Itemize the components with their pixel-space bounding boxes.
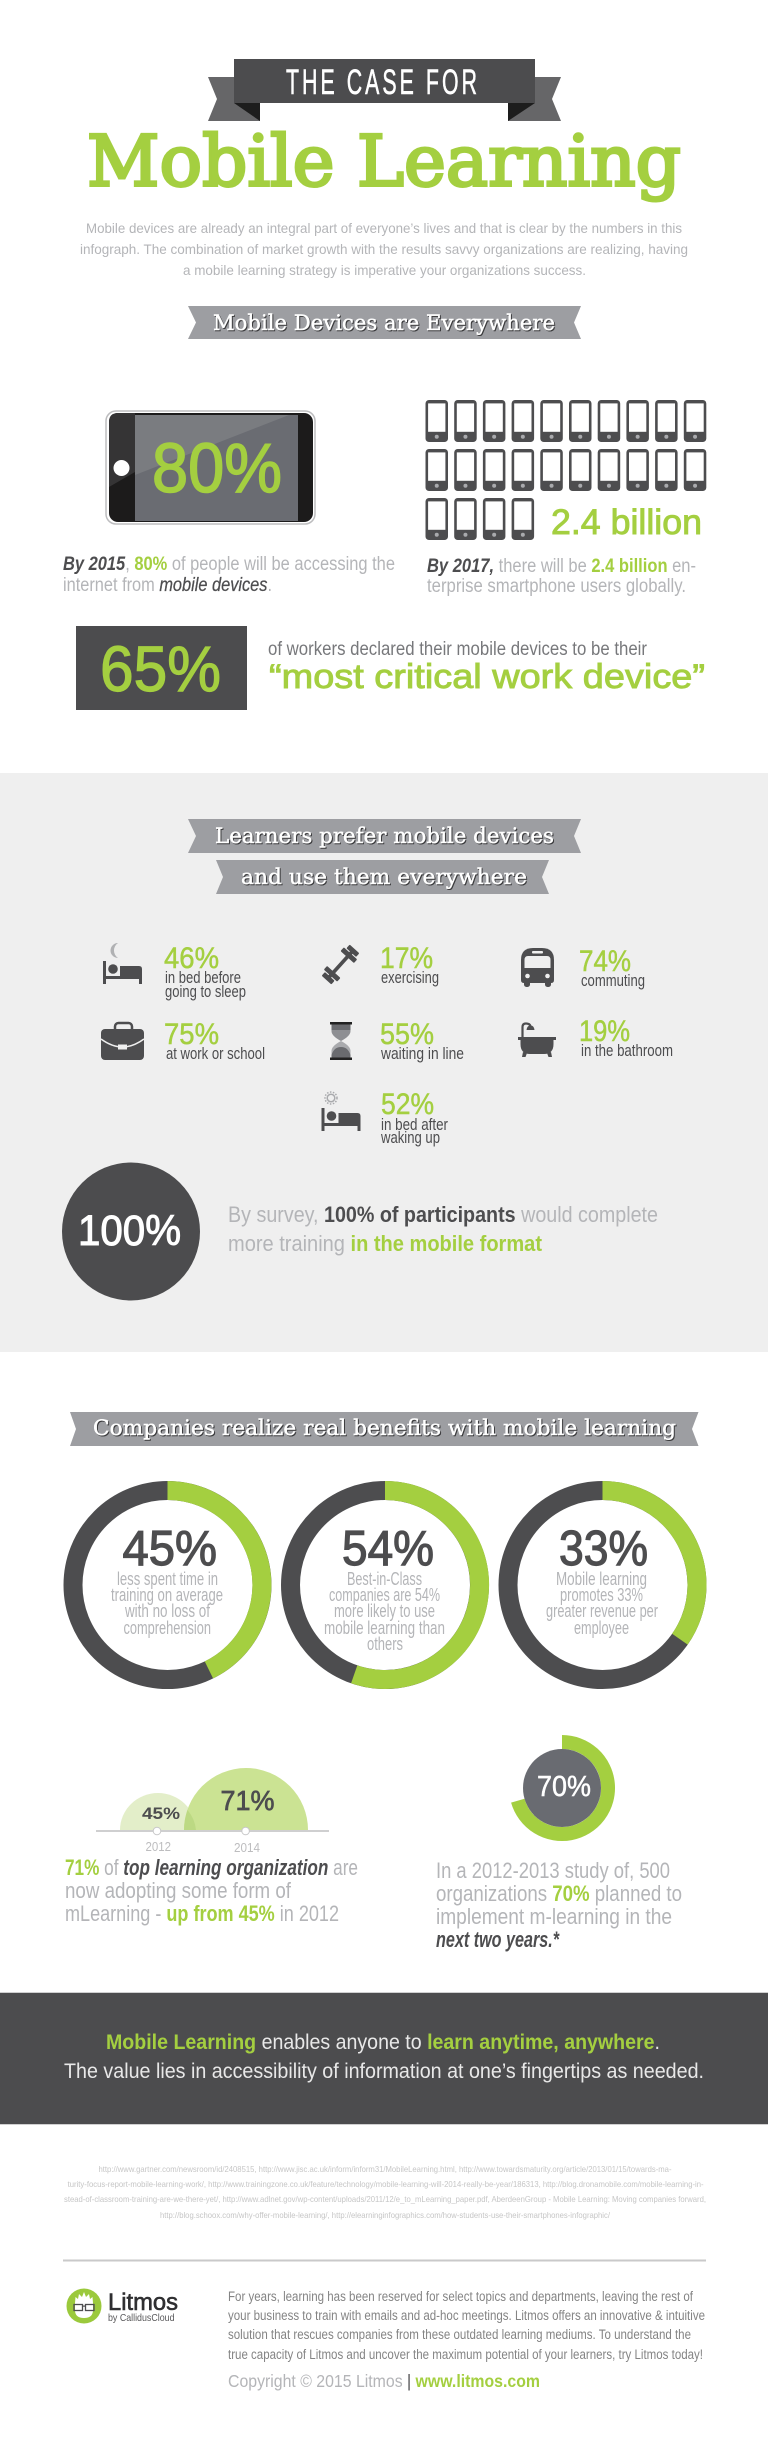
text: about Litmos bbox=[228, 2289, 705, 2362]
ribbon heading: Companies realize real benefits: Companies realize real benefits with mobile learning bbox=[93, 1416, 676, 1441]
text: 2.4 billion stat description: terprise smartphone users globally. bbox=[427, 576, 686, 597]
stat: 52% in bed after waking up: waking up bbox=[380, 1129, 440, 1147]
stat: 52% in bed after waking up: in bed after bbox=[381, 1116, 448, 1134]
stat: 19% in the bathroom: 19% bbox=[579, 1015, 630, 1048]
donut: 33%: 33% bbox=[559, 1522, 648, 1576]
chart: adoption 2012 to 2014: 45% bbox=[142, 1804, 180, 1823]
icon grid: smartphones with 2.4 billion bbox=[426, 400, 706, 542]
chart: adoption 2012 to 2014 bbox=[96, 1768, 329, 1855]
donut: 54%: Best-in-Class bbox=[347, 1569, 422, 1589]
intro paragraph: Mobile devices are already an integral part of everyone’s lives and that is clear by the numbers in this bbox=[86, 220, 682, 236]
text: source citations: http://blog.schoox.com/why-offer-mobile-learning/, http://elearninginfographics.com/how-students-use-their-smartphones-infographic/ bbox=[160, 2210, 611, 2220]
text: 71% of top learning organizations: now adopting some form of bbox=[65, 1878, 292, 1903]
intro paragraph bbox=[80, 220, 688, 278]
stat: 52% in bed after waking up: 52% bbox=[381, 1088, 434, 1121]
stat: 55% waiting in line: 55% bbox=[380, 1018, 434, 1051]
donut: 54%: companies are 54% bbox=[329, 1585, 440, 1605]
stat: 17% exercising: exercising bbox=[381, 969, 439, 987]
stat circle: 100% bbox=[62, 1162, 200, 1300]
stat: 75% at work or school: 75% bbox=[164, 1018, 219, 1051]
stat: 46% in bed before going to sleep bbox=[164, 942, 246, 1001]
panel: conclusion band bbox=[0, 1992, 768, 2125]
panel: conclusion band: Mobile Learning enables anyone to learn anytime, anywhere. bbox=[106, 2031, 660, 2054]
stat: 75% at work or school: at work or school bbox=[166, 1045, 265, 1063]
stat: 74% commuting: 74% bbox=[579, 945, 631, 978]
text: source citations bbox=[64, 2164, 706, 2220]
stat: 52% in bed after waking up bbox=[380, 1088, 448, 1147]
donut: 45% bbox=[73, 1490, 262, 1680]
text: source citations: stead-of-classroom-training-are-we-there-yet/, http://www.adlnet.gov/wp-content/uploads/2011/12/e_to_mLearning_paper.pdf, AberdeenGroup - Mobile Learning: Moving companies forward, bbox=[64, 2194, 706, 2204]
donut: 45%: less spent time in bbox=[117, 1569, 218, 1589]
icon: bathtub bbox=[518, 1024, 556, 1057]
panel: learners prefer mobile devices bbox=[0, 773, 768, 1352]
donut: 33% bbox=[508, 1490, 697, 1680]
stat: 19% in the bathroom bbox=[579, 1015, 673, 1060]
ribbon heading: Companies realize real benefits bbox=[70, 1412, 698, 1446]
text: 2012-2013 study: next two years.* bbox=[436, 1927, 560, 1952]
text: about Litmos: solution that rescues companies from these outdated learning mediums. To understand the bbox=[228, 2327, 691, 2342]
intro paragraph: infograph. The combination of market growth with the results savvy organizations are realizing, having bbox=[80, 241, 688, 257]
donut: 54%: more likely to use bbox=[334, 1601, 435, 1621]
logo: Litmos by CallidusCloud: Litmos bbox=[108, 2289, 178, 2316]
chart: adoption 2012 to 2014: 2014 bbox=[234, 1841, 260, 1855]
donut: 70%: 70% bbox=[537, 1771, 591, 1803]
ribbon heading: and use them everywhere: and use them everywhere bbox=[241, 865, 527, 890]
stat box: 65% bbox=[76, 626, 247, 710]
donut: 33%: promotes 33% bbox=[560, 1585, 643, 1605]
title banner: The Case For bbox=[208, 59, 561, 121]
text: survey result: By survey, 100% of participants would complete bbox=[228, 1202, 658, 1227]
text: 71% of top learning organizations: 71% of top learning organization are bbox=[65, 1855, 358, 1880]
icon: dumbbell bbox=[320, 943, 361, 986]
icon: hourglass bbox=[330, 1022, 352, 1060]
stat: 74% commuting: commuting bbox=[581, 972, 645, 990]
title: Mobile Learning: Mobile Learning bbox=[87, 120, 681, 202]
donut: 54%: others bbox=[367, 1634, 403, 1654]
donut: 45%: 45% bbox=[122, 1522, 217, 1576]
donut: 54% bbox=[290, 1490, 480, 1680]
text: most critical work device bbox=[268, 639, 705, 696]
chart: adoption 2012 to 2014: 2012 bbox=[146, 1840, 171, 1854]
text: 80% stat description: internet from mobile devices. bbox=[63, 575, 272, 596]
stat circle: 100%: 100% bbox=[78, 1207, 181, 1255]
text: 80% stat description: By 2015, 80% of people will be accessing the bbox=[63, 554, 395, 575]
icon: bed with sun bbox=[322, 1092, 360, 1131]
stat: 55% waiting in line: waiting in line bbox=[380, 1045, 464, 1063]
stat: 46% in bed before going to sleep: in bed before bbox=[165, 969, 241, 987]
ribbon heading: and use them everywhere bbox=[216, 860, 549, 894]
text: source citations: turity-focus-report-mobile-learning-work/, http://www.trainingzone.co.uk/feature/technology/mobile-learning-will-2014-really-be-year/186313, http://blog.dronamobile.com/mobile-learning-in- bbox=[68, 2179, 704, 2189]
text: survey result: more training in the mobile format bbox=[228, 1231, 542, 1256]
icon grid: smartphones with 2.4 billion: 2.4 billion bbox=[551, 503, 702, 542]
stat box: 65%: 65% bbox=[100, 633, 221, 705]
icon: bed with moon bbox=[103, 943, 142, 984]
icon: tablet with 80%: 80% bbox=[152, 429, 282, 507]
text: copyright and website: Copyright © 2015 Litmos | www.litmos.com bbox=[228, 2371, 540, 2391]
stat: 75% at work or school bbox=[164, 1018, 265, 1063]
stat: 55% waiting in line bbox=[380, 1018, 464, 1063]
text: 2012-2013 study bbox=[436, 1858, 682, 1952]
icon: tablet with 80% bbox=[106, 411, 315, 524]
donut: 45%: training on average bbox=[111, 1585, 223, 1605]
stat: 46% in bed before going to sleep: going to sleep bbox=[165, 983, 246, 1001]
donut: 54%: mobile learning than bbox=[324, 1618, 445, 1638]
text: 71% of top learning organizations: mLearning - up from 45% in 2012 bbox=[65, 1901, 339, 1926]
donut: 33%: greater revenue per bbox=[546, 1601, 658, 1621]
chart: adoption 2012 to 2014: 71% bbox=[220, 1785, 274, 1816]
ribbon heading: Mobile Devices are Everywhere bbox=[188, 306, 581, 339]
text: 2012-2013 study: implement m-learning in the bbox=[436, 1904, 672, 1929]
ribbon heading: Learners prefer mobile devices bbox=[188, 819, 581, 853]
panel: conclusion band: The value lies in accessibility of information at one’s fingertips as needed. bbox=[64, 2060, 704, 2083]
text: survey result bbox=[228, 1202, 658, 1256]
text: most critical work device: of workers declared their mobile devices to be their bbox=[268, 639, 648, 660]
text: 2.4 billion stat description: By 2017, there will be 2.4 billion en- bbox=[427, 556, 696, 577]
donut: 33%: employee bbox=[574, 1618, 629, 1638]
text: most critical work device: “most critical work device” bbox=[269, 658, 705, 696]
stat: 19% in the bathroom: in the bathroom bbox=[581, 1042, 673, 1060]
stat: 74% commuting bbox=[579, 945, 645, 990]
donut: 33%: Mobile learning bbox=[556, 1569, 647, 1589]
donut: 54%: 54% bbox=[342, 1522, 434, 1576]
icon: bus bbox=[521, 948, 554, 987]
icon: briefcase bbox=[101, 1023, 144, 1060]
logo: Litmos by CallidusCloud bbox=[66, 2288, 178, 2324]
ribbon heading: Mobile Devices are Everywhere: Mobile Devices are Everywhere bbox=[213, 311, 555, 336]
donut: 45%: with no loss of bbox=[124, 1601, 211, 1621]
ribbon heading: Learners prefer mobile devices: Learners prefer mobile devices bbox=[215, 824, 554, 849]
stat: 17% exercising: 17% bbox=[380, 942, 433, 975]
text: 71% of top learning organizations bbox=[65, 1855, 358, 1926]
logo: Litmos by CallidusCloud: by CallidusCloud bbox=[108, 2312, 175, 2324]
text: 2012-2013 study: organizations 70% planned to bbox=[436, 1881, 682, 1906]
stat: 46% in bed before going to sleep: 46% bbox=[164, 942, 219, 975]
text: about Litmos: For years, learning has been reserved for select topics and departments, leaving the rest of bbox=[228, 2289, 693, 2304]
intro paragraph: a mobile learning strategy is imperative your organizations success. bbox=[183, 262, 586, 278]
donut: 70% bbox=[518, 1742, 608, 1834]
text: source citations: http://www.gartner.com/newsroom/id/2408515, http://www.jisc.ac.uk/inform/inform31/MobileLearning.html, http://www.towardsmaturity.org/article/2013/01/15/towards-ma- bbox=[98, 2164, 672, 2174]
text: 2012-2013 study: In a 2012-2013 study of, 500 bbox=[436, 1858, 670, 1883]
text: 80% stat description bbox=[63, 554, 395, 596]
donut: 45%: comprehension bbox=[124, 1618, 211, 1638]
text: 2.4 billion stat description bbox=[427, 556, 696, 597]
title banner: The Case For: THE CASE FOR bbox=[286, 63, 480, 102]
